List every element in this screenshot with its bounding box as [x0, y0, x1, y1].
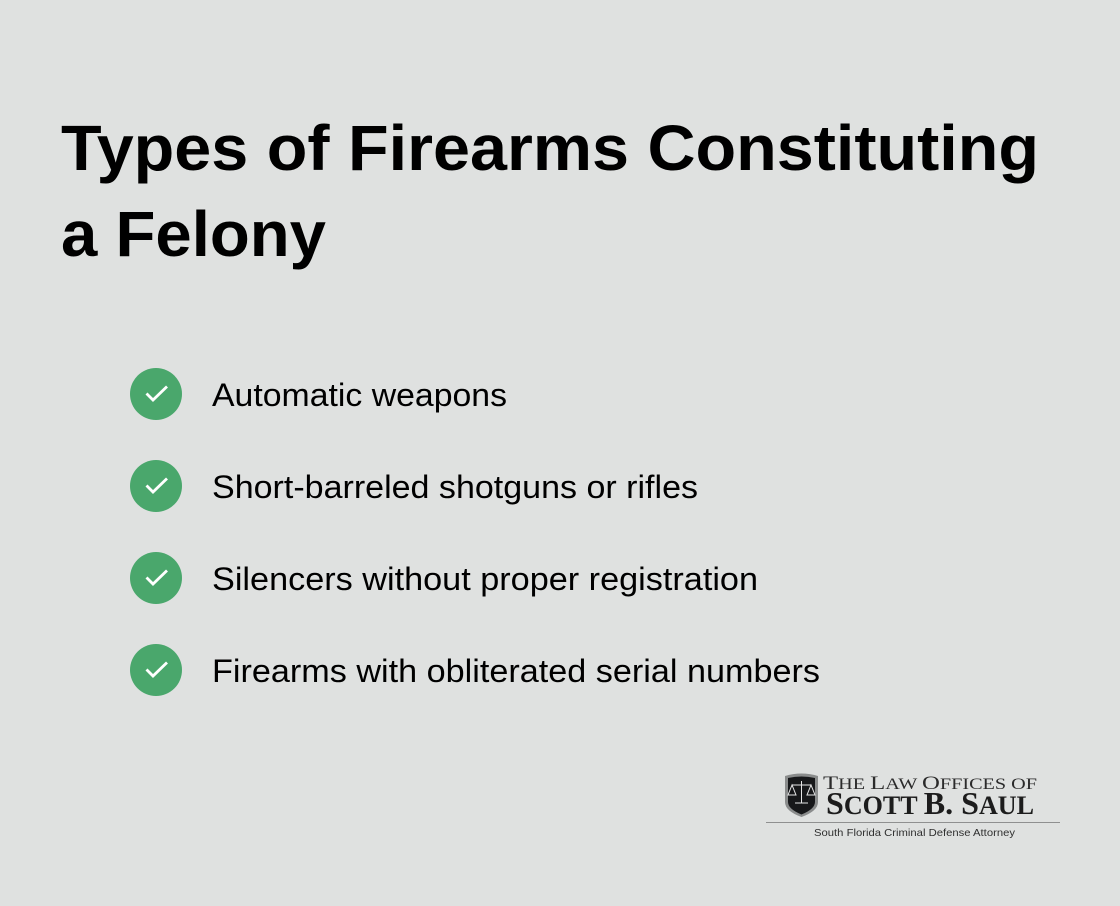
list item: short-barreled shotguns or rifles: [130, 460, 698, 512]
title: Types of Firearms Constituting: [61, 112, 1039, 184]
logo line: the law offices of: THE LAW O FFICES OF: [823, 773, 1037, 794]
list item: automatic weapons: Automatic weapons: [212, 377, 507, 413]
list item: firearms with obliterated serial numbers: Firearms with obliterated serial numbers: [212, 653, 820, 689]
title: a Felony: [61, 198, 326, 270]
checklist: [130, 368, 820, 696]
logo line: scott b. saul: SCOTT B. SAUL: [826, 785, 1034, 821]
list item: short-barreled shotguns or rifles: Short-barreled shotguns or rifles: [212, 469, 698, 505]
title: [61, 112, 1039, 270]
list item: automatic weapons: [130, 368, 507, 420]
list item: silencers without proper registration: [130, 552, 758, 604]
list item: firearms with obliterated serial numbers: [130, 644, 820, 696]
icon: shield with scales of justice: [785, 774, 818, 817]
logo: The Law Offices of Scott B. Saul: [766, 773, 1060, 839]
logo tagline: South Florida Criminal Defense Attorney: [814, 827, 1016, 839]
logo divider: [766, 822, 1060, 823]
list item: silencers without proper registration: Silencers without proper registration: [212, 561, 758, 597]
